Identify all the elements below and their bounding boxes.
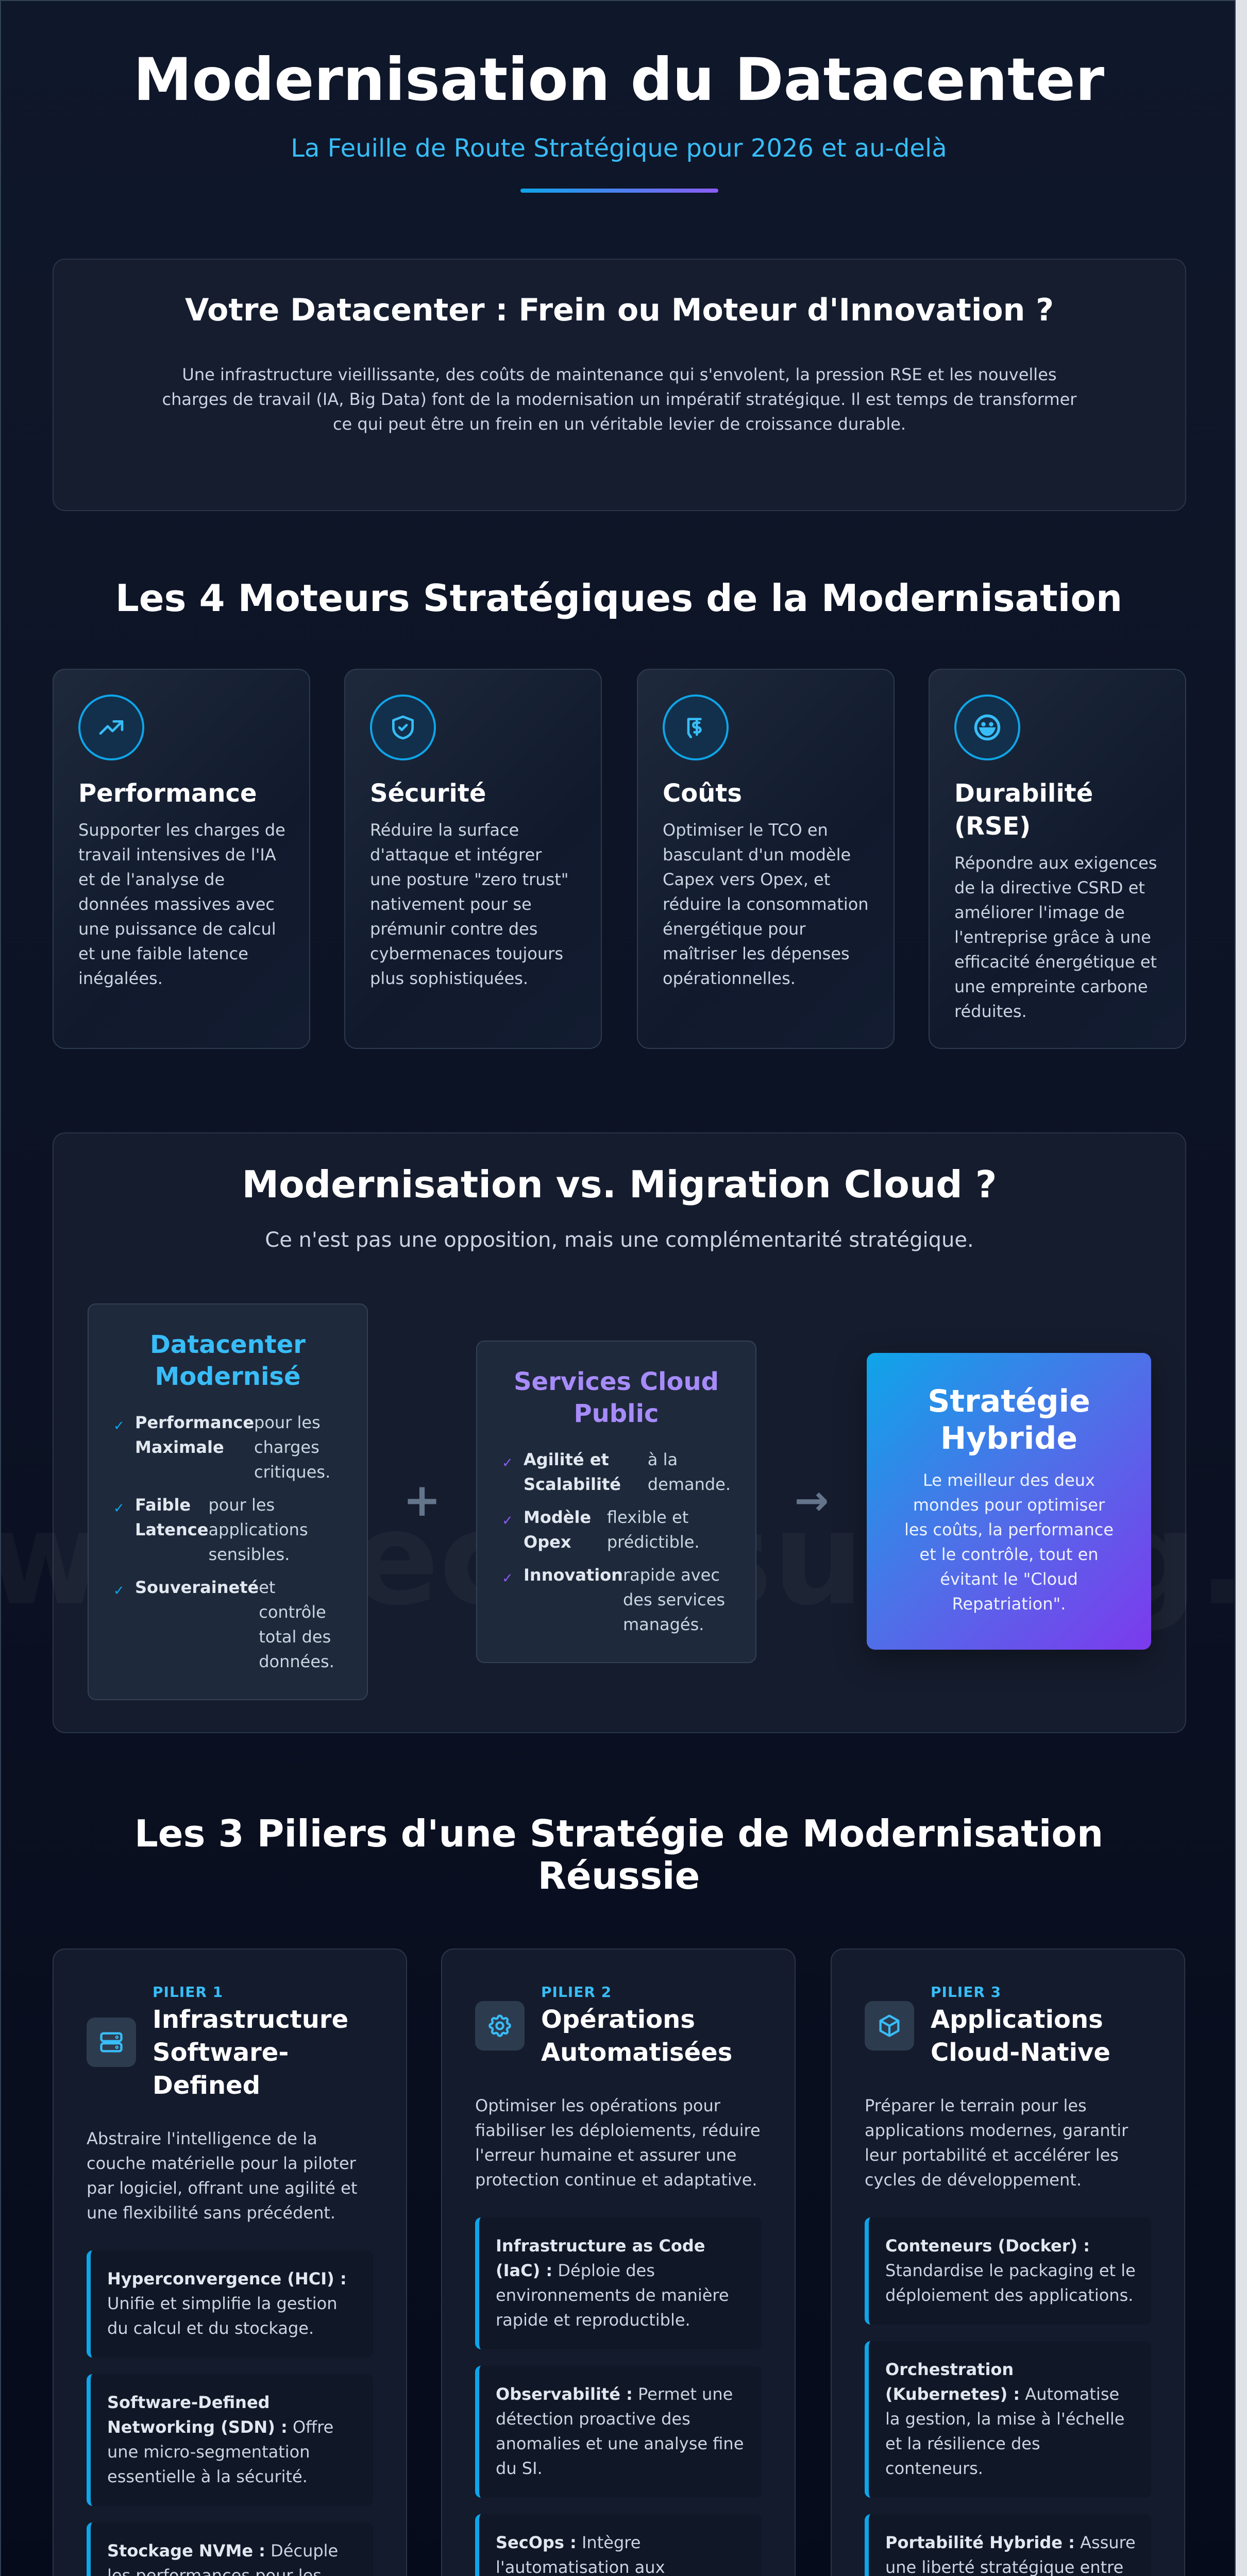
- box: strategie hybride: Repatriation".: [952, 1594, 1066, 1614]
- intro heading: Votre Datacenter : Frein ou Moteur d'Innovation ?: [185, 293, 1054, 329]
- pillar 1 header: [87, 1985, 348, 2100]
- box: cloud public: à la demande.: [648, 1449, 731, 1494]
- icon: gear: [475, 2001, 525, 2050]
- pillar 3 header: PILIER 3: [931, 1985, 1001, 2001]
- pillar 2 header: Automatisées: [541, 2038, 732, 2067]
- durabilite text: Durabilité: [954, 779, 1093, 808]
- pillar 1 header: PILIER 1: [153, 1985, 223, 2001]
- performance text: et de l'analyse de: [78, 870, 225, 889]
- pillar 2 description: [475, 2096, 761, 2190]
- feature: IaC: environnements de manière: [496, 2285, 729, 2305]
- couts text: réduire la consommation: [663, 894, 869, 914]
- icon: server: [87, 2018, 136, 2067]
- feature: IaC: (IaC) : Déploie des: [496, 2261, 655, 2280]
- pillar 1: [53, 1948, 407, 2576]
- feature: kubernetes: Orchestration: [885, 2360, 1014, 2379]
- subtitle: La Feuille de Route Stratégique pour 2026 et au-delà: [291, 134, 947, 163]
- icon: shield: [370, 694, 436, 760]
- pillar 1 description: Abstraire l'intelligence de la: [87, 2129, 317, 2148]
- durabilite text: réduites.: [954, 1002, 1027, 1021]
- box: strategie hybride: Stratégie: [928, 1384, 1090, 1420]
- pillar 3 description: applications modernes, garantir: [865, 2121, 1128, 2140]
- securite text: [370, 779, 568, 988]
- couts text: énergétique pour: [663, 919, 805, 939]
- card: couts: [637, 669, 895, 1049]
- couts text: maîtriser les dépenses: [663, 944, 850, 963]
- box: cloud public: ✓: [502, 1513, 513, 1529]
- heading: 4 moteurs: Les 4 Moteurs Stratégiques de la Modernisation: [115, 578, 1122, 620]
- pillar 1 description: une flexibilité sans précédent.: [87, 2203, 335, 2223]
- feature: SecOps: [475, 2514, 762, 2576]
- couts text: basculant d'un modèle: [663, 845, 851, 865]
- pillar 3 description: [865, 2096, 1128, 2190]
- box: cloud public: ✓: [502, 1571, 513, 1586]
- pillar 2: [441, 1948, 796, 2576]
- intro text: Une infrastructure vieillissante, des coûts de maintenance qui s'envolent, la pression RSE et les nouvelles: [182, 365, 1057, 384]
- securite text: d'attaque et intégrer: [370, 845, 542, 865]
- box: cloud public: Services Cloud Public: [514, 1367, 719, 1428]
- box: strategie hybride: mondes pour optimiser: [913, 1495, 1105, 1515]
- box: datacenter modernise: pour les charges critiques.: [254, 1412, 330, 1481]
- couts text: Capex vers Opex, et: [663, 870, 830, 889]
- pillar 3: [831, 1948, 1185, 2576]
- couts text: Optimiser le TCO en: [663, 820, 828, 840]
- feature: kubernetes: et la résilience des: [885, 2434, 1040, 2453]
- icon: trending up: [78, 694, 144, 760]
- pillar 2 header: Opérations: [541, 2005, 695, 2034]
- pillar 2 description: l'erreur humaine et assurer une: [475, 2145, 736, 2165]
- feature: kubernetes: la gestion, la mise à l'échelle: [885, 2409, 1124, 2429]
- box: strategie hybride: et le contrôle, tout en: [919, 1545, 1099, 1564]
- securite text: une posture "zero trust": [370, 870, 568, 889]
- pillar 1 description: [87, 2129, 357, 2223]
- heading: 3 piliers: Les 3 Piliers d'une Stratégie de Modernisation: [134, 1814, 1103, 1856]
- feature: SDN: essentielle à la sécurité.: [107, 2467, 308, 2486]
- feature: conteneurs: Standardise le packaging et le: [885, 2261, 1136, 2280]
- feature: IaC: Infrastructure as Code: [496, 2236, 705, 2256]
- securite text: plus sophistiquées.: [370, 969, 528, 988]
- feature: observabilite: anomalies et une analyse fine: [496, 2434, 744, 2453]
- pillar 1 header: Defined: [153, 2071, 260, 2100]
- box: strategie hybride: Le meilleur des deux: [923, 1470, 1095, 1490]
- feature: HCI: Hyperconvergence (HCI) :: [107, 2269, 347, 2289]
- box: datacenter modernise: pour les applications sensibles.: [208, 1495, 308, 1564]
- feature: observabilite: du SI.: [496, 2459, 543, 2478]
- title: Modernisation du Datacenter: [133, 46, 1104, 114]
- feature: conteneurs: déploiement des applications.: [885, 2285, 1133, 2305]
- pillar 2 description: protection continue et adaptative.: [475, 2170, 757, 2190]
- securite text: prémunir contre des: [370, 919, 537, 939]
- pillar 1 description: par logiciel, offrant une agilité et: [87, 2178, 357, 2198]
- pillar 2 description: Optimiser les opérations pour: [475, 2096, 720, 2115]
- pillar 2 description: fiabiliser les déploiements, réduire: [475, 2121, 761, 2140]
- feature: portabilite: Portabilité Hybride : Assure: [885, 2533, 1136, 2552]
- feature: HCI: du calcul et du stockage.: [107, 2318, 314, 2338]
- pillar 3 description: leur portabilité et accélérer les: [865, 2145, 1119, 2165]
- pillar 1 header: Software-: [153, 2038, 289, 2067]
- card: durabilite: [929, 669, 1186, 1049]
- durabilite text: l'entreprise grâce à une: [954, 927, 1151, 947]
- heading: 3 piliers: [134, 1814, 1103, 1898]
- securite text: Réduire la surface: [370, 820, 519, 840]
- box: cloud public: ✓: [502, 1455, 513, 1471]
- intro text: ce qui peut être un frein en un véritable levier de croissance durable.: [333, 414, 906, 434]
- securite text: cybermenaces toujours: [370, 944, 563, 963]
- durabilite text: une empreinte carbone: [954, 977, 1148, 996]
- box: strategie hybride: Hybride: [940, 1421, 1077, 1457]
- box: cloud public: Innovation: [524, 1565, 623, 1584]
- pillar 3 header: Applications: [931, 2005, 1103, 2034]
- arrow: →: [794, 1478, 829, 1525]
- icon: smile: [954, 694, 1020, 760]
- box: datacenter modernise: [88, 1303, 368, 1700]
- feature: NVMe: [87, 2522, 373, 2576]
- performance text: Performance: [78, 779, 257, 808]
- feature: SDN: Software-Defined: [107, 2393, 270, 2412]
- performance text: Supporter les charges de: [78, 820, 285, 840]
- accent bar: [520, 189, 718, 193]
- feature: SecOps: SecOps : Intègre: [496, 2533, 641, 2552]
- couts text: [663, 779, 869, 988]
- comparison subtitle: Ce n'est pas une opposition, mais une complémentarité stratégique.: [265, 1227, 974, 1252]
- feature: NVMe: Stockage NVMe : Décuple: [107, 2541, 338, 2561]
- panel: intro: [53, 259, 1186, 511]
- pillar 1 header: Infrastructure: [153, 2005, 348, 2034]
- comparison heading: Modernisation vs. Migration Cloud ?: [242, 1164, 997, 1207]
- durabilite text: de la directive CSRD et: [954, 878, 1145, 897]
- feature: SDN: [87, 2374, 373, 2506]
- box: datacenter modernise: ✓: [113, 1583, 125, 1599]
- pillar 1 description: couche matérielle pour la piloter: [87, 2154, 356, 2173]
- durabilite text: améliorer l'image de: [954, 903, 1125, 922]
- card: performance: [53, 669, 310, 1049]
- feature: HCI: Unifie et simplifie la gestion: [107, 2294, 337, 2313]
- box: cloud public: [476, 1340, 756, 1663]
- pillar 3 header: [865, 1985, 1110, 2067]
- box: datacenter modernise: Datacenter Modernisé: [150, 1330, 306, 1391]
- feature: portabilite: [865, 2514, 1151, 2576]
- durabilite text: (RSE): [954, 812, 1031, 841]
- feature: observabilite: détection proactive des: [496, 2409, 690, 2429]
- feature: SDN: Networking (SDN) : Offre: [107, 2417, 333, 2437]
- box: datacenter modernise: ✓: [113, 1418, 125, 1434]
- icon: dollar: [663, 694, 729, 760]
- feature: IaC: rapide et reproductible.: [496, 2310, 690, 2330]
- securite text: nativement pour se: [370, 894, 532, 914]
- feature: kubernetes: [865, 2341, 1151, 2498]
- feature: HCI: [87, 2250, 373, 2358]
- pillar 2 header: PILIER 2: [541, 1985, 612, 2001]
- card: securite: [344, 669, 602, 1049]
- performance text: données massives avec: [78, 894, 275, 914]
- box: cloud public: rapide avec des services managés.: [623, 1565, 725, 1634]
- durabilite text: [954, 779, 1157, 1021]
- box: datacenter modernise: Souveraineté: [135, 1577, 259, 1597]
- box: datacenter modernise: et contrôle total des données.: [259, 1577, 334, 1671]
- durabilite text: efficacité énergétique et: [954, 952, 1157, 972]
- box: cloud public: flexible et prédictible.: [607, 1507, 700, 1551]
- feature: observabilite: Observabilité : Permet une: [496, 2384, 733, 2404]
- performance text: travail intensives de l'IA: [78, 845, 276, 865]
- feature: kubernetes: conteneurs.: [885, 2459, 983, 2478]
- feature: conteneurs: Conteneurs (Docker) :: [885, 2236, 1090, 2256]
- intro text: [162, 365, 1077, 434]
- securite text: Sécurité: [370, 779, 486, 808]
- box: datacenter modernise: Performance Maximale: [135, 1412, 254, 1456]
- icon: plus: +: [403, 1475, 441, 1527]
- pillar 2 header: [475, 1985, 732, 2067]
- feature: conteneurs: [865, 2217, 1151, 2325]
- performance text: et une faible latence: [78, 944, 248, 963]
- feature: observabilite: [475, 2366, 762, 2498]
- box: strategie hybride: [867, 1353, 1151, 1650]
- box: strategie hybride: évitant le "Cloud: [940, 1569, 1078, 1589]
- icon: cube: [865, 2001, 914, 2050]
- pillar 3 header: Cloud-Native: [931, 2038, 1110, 2067]
- feature: SDN: une micro-segmentation: [107, 2442, 310, 2462]
- box: strategie hybride: les coûts, la performance: [904, 1520, 1114, 1539]
- pillar 3 description: cycles de développement.: [865, 2170, 1082, 2190]
- box: datacenter modernise: Faible Latence: [135, 1495, 208, 1539]
- heading: 3 piliers: Réussie: [538, 1856, 700, 1898]
- performance text: [78, 779, 285, 988]
- couts text: opérationnelles.: [663, 969, 796, 988]
- couts text: Coûts: [663, 779, 742, 808]
- feature: kubernetes: (Kubernetes) : Automatise: [885, 2384, 1119, 2404]
- panel: modernisation vs cloud: [53, 1132, 1186, 1733]
- performance text: inégalées.: [78, 969, 163, 988]
- box: datacenter modernise: ✓: [113, 1501, 125, 1516]
- box: cloud public: Agilité et Scalabilité: [524, 1449, 621, 1494]
- intro text: charges de travail (IA, Big Data) font de la modernisation un impératif stratégique. Il est temps de transformer: [162, 389, 1076, 409]
- feature: IaC: [475, 2217, 762, 2349]
- comparison row: [88, 1303, 1153, 1700]
- pillar 3 description: Préparer le terrain pour les: [865, 2096, 1087, 2115]
- performance text: une puissance de calcul: [78, 919, 276, 939]
- durabilite text: Répondre aux exigences: [954, 853, 1157, 873]
- box: cloud public: Modèle Opex: [524, 1507, 591, 1551]
